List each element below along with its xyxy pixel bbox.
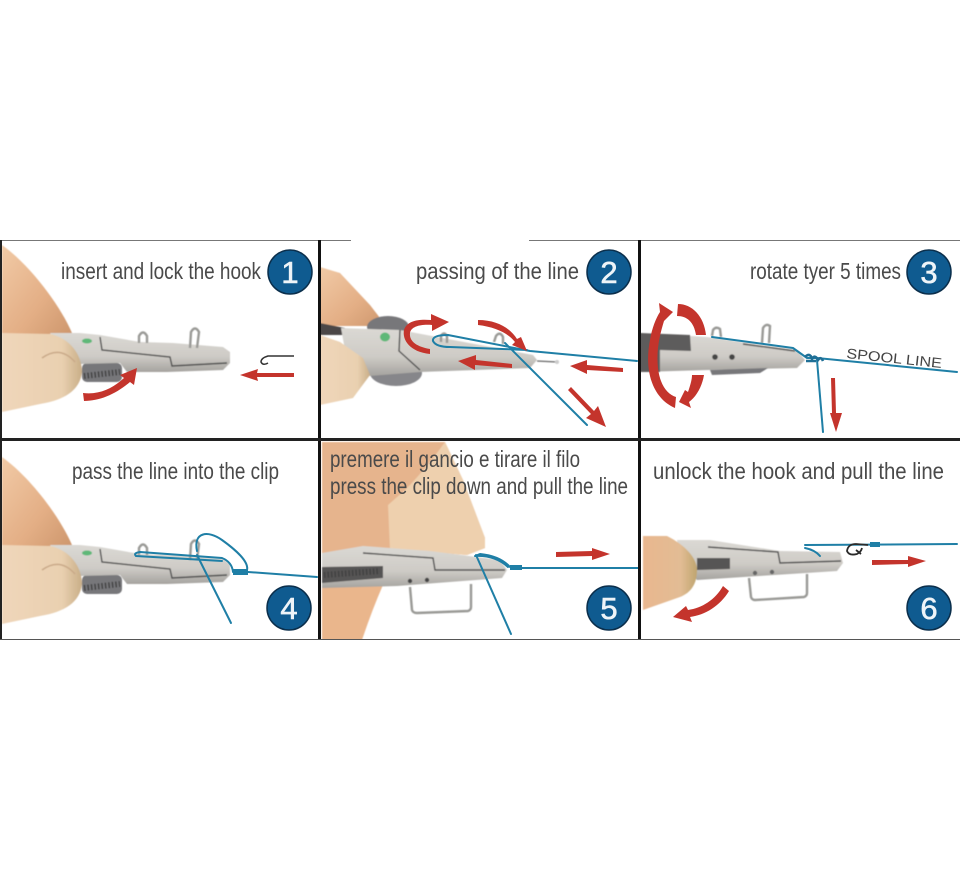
down arrow (830, 378, 842, 432)
step 1 caption: insert and lock the hook (61, 258, 261, 284)
curved arrow toward the wheel (83, 368, 137, 401)
curved arrow lower left (673, 586, 729, 622)
blue fishing line (712, 337, 957, 432)
rotation arrow, right (677, 304, 706, 335)
hook and blue line (805, 542, 957, 556)
hook (261, 356, 294, 364)
step 2 caption: passing of the line (416, 258, 579, 284)
hand and tool, step 5 (322, 442, 507, 640)
badge 4 (267, 586, 311, 630)
badge 3: 3 (920, 255, 938, 290)
badge 1 (268, 250, 312, 294)
badge 4: 4 (280, 591, 298, 626)
arrow right (556, 548, 610, 560)
panel 5: press the clip down (320, 440, 640, 640)
badge 5: 5 (600, 591, 618, 626)
hand and tool, step 1 (2, 245, 230, 412)
spool line label: SPOOL LINE (846, 345, 943, 371)
hand and tool, step 6 (643, 536, 843, 610)
badge 2 (587, 250, 631, 294)
hand and tool, step 2 (320, 267, 559, 405)
blue fishing line (433, 335, 637, 425)
tool, step 3 (640, 325, 805, 375)
panel 3: rotate tyer 5 times (640, 240, 960, 440)
step 3 caption: rotate tyer 5 times (750, 258, 901, 284)
badge 3 (907, 250, 951, 294)
badge 5 (587, 586, 631, 630)
badge 6: 6 (920, 591, 938, 626)
step 5 caption, two lines: press the clip down and pull the line (330, 473, 628, 499)
step 4 caption: pass the line into the clip (72, 458, 279, 484)
panel 1: insert and lock the hook (2, 245, 313, 412)
step 5 caption, two lines (330, 446, 628, 499)
panel 2: passing of the line (321, 249, 638, 427)
hand and tool, step 4 (2, 457, 230, 624)
step 5 caption, two lines: premere il gancio e tirare il filo (330, 446, 580, 472)
rotation arrow, lower right (679, 375, 704, 408)
diagonal arrow (568, 387, 606, 427)
panel 6: unlock the hook (642, 462, 958, 631)
rotation arrow, left (648, 303, 676, 408)
blue fishing line (475, 554, 638, 634)
panel 4: pass the line into the clip (2, 456, 318, 631)
straight arrow toward the tool (240, 369, 294, 381)
badge 6 (907, 586, 951, 630)
back arrow on tool (458, 355, 512, 370)
badge 1: 1 (281, 255, 299, 290)
grid borders (0, 240, 960, 640)
blue fishing line (135, 534, 317, 623)
curved arrow around the tool top (404, 314, 449, 354)
straight arrow right of tool (570, 360, 623, 374)
curved arrow toward the tip (478, 320, 527, 351)
arrow right (872, 556, 926, 567)
badge 2: 2 (600, 255, 618, 290)
